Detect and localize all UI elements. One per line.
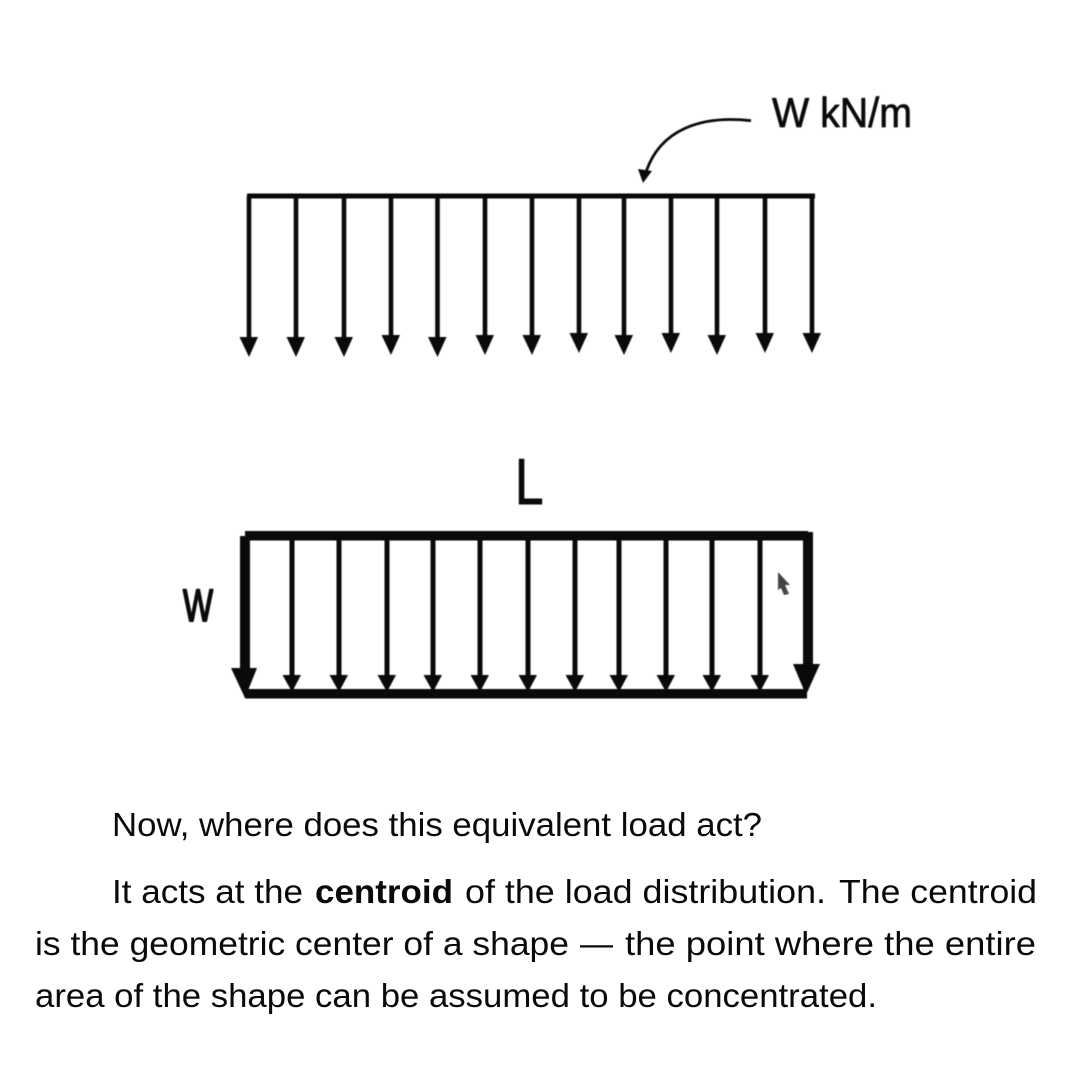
top bar of distributed load xyxy=(247,194,815,198)
inner thin arrows xyxy=(282,540,769,692)
line: centroid statement xyxy=(112,874,1037,911)
label: W: W xyxy=(183,580,213,631)
text block: explanation xyxy=(35,807,1037,1015)
icon: mouse cursor xyxy=(778,572,790,595)
label: L: L xyxy=(515,445,544,518)
line: centroid statement: of the load distribution. xyxy=(465,874,826,911)
line: centroid definition: — xyxy=(580,926,613,963)
top bar xyxy=(245,531,808,540)
line: centroid definition: the point where the entire xyxy=(625,926,1036,963)
line: centroid statement: The centroid xyxy=(839,874,1037,911)
line: centroid definition xyxy=(35,926,1036,963)
thick right arrow xyxy=(793,532,820,695)
thick left arrow xyxy=(231,536,257,698)
label: W kN/m: W kN/m xyxy=(772,89,912,136)
bottom bar xyxy=(245,689,807,698)
line: centroid definition end: area of the shape can be assumed to be concentrated. xyxy=(35,978,877,1015)
line: centroid statement: centroid xyxy=(315,874,453,911)
line: question: Now, where does this equivalent load act? xyxy=(112,807,762,844)
line: centroid definition: is the geometric center of a shape xyxy=(35,926,569,963)
curved arrow pointing to the distributed load xyxy=(638,120,751,183)
row of thirteen downward arrows xyxy=(240,196,821,357)
diagram: distributed load W kN/m xyxy=(240,194,821,357)
diagram: equivalent rectangular load xyxy=(231,531,820,698)
line: centroid statement: It acts at the xyxy=(112,874,303,911)
